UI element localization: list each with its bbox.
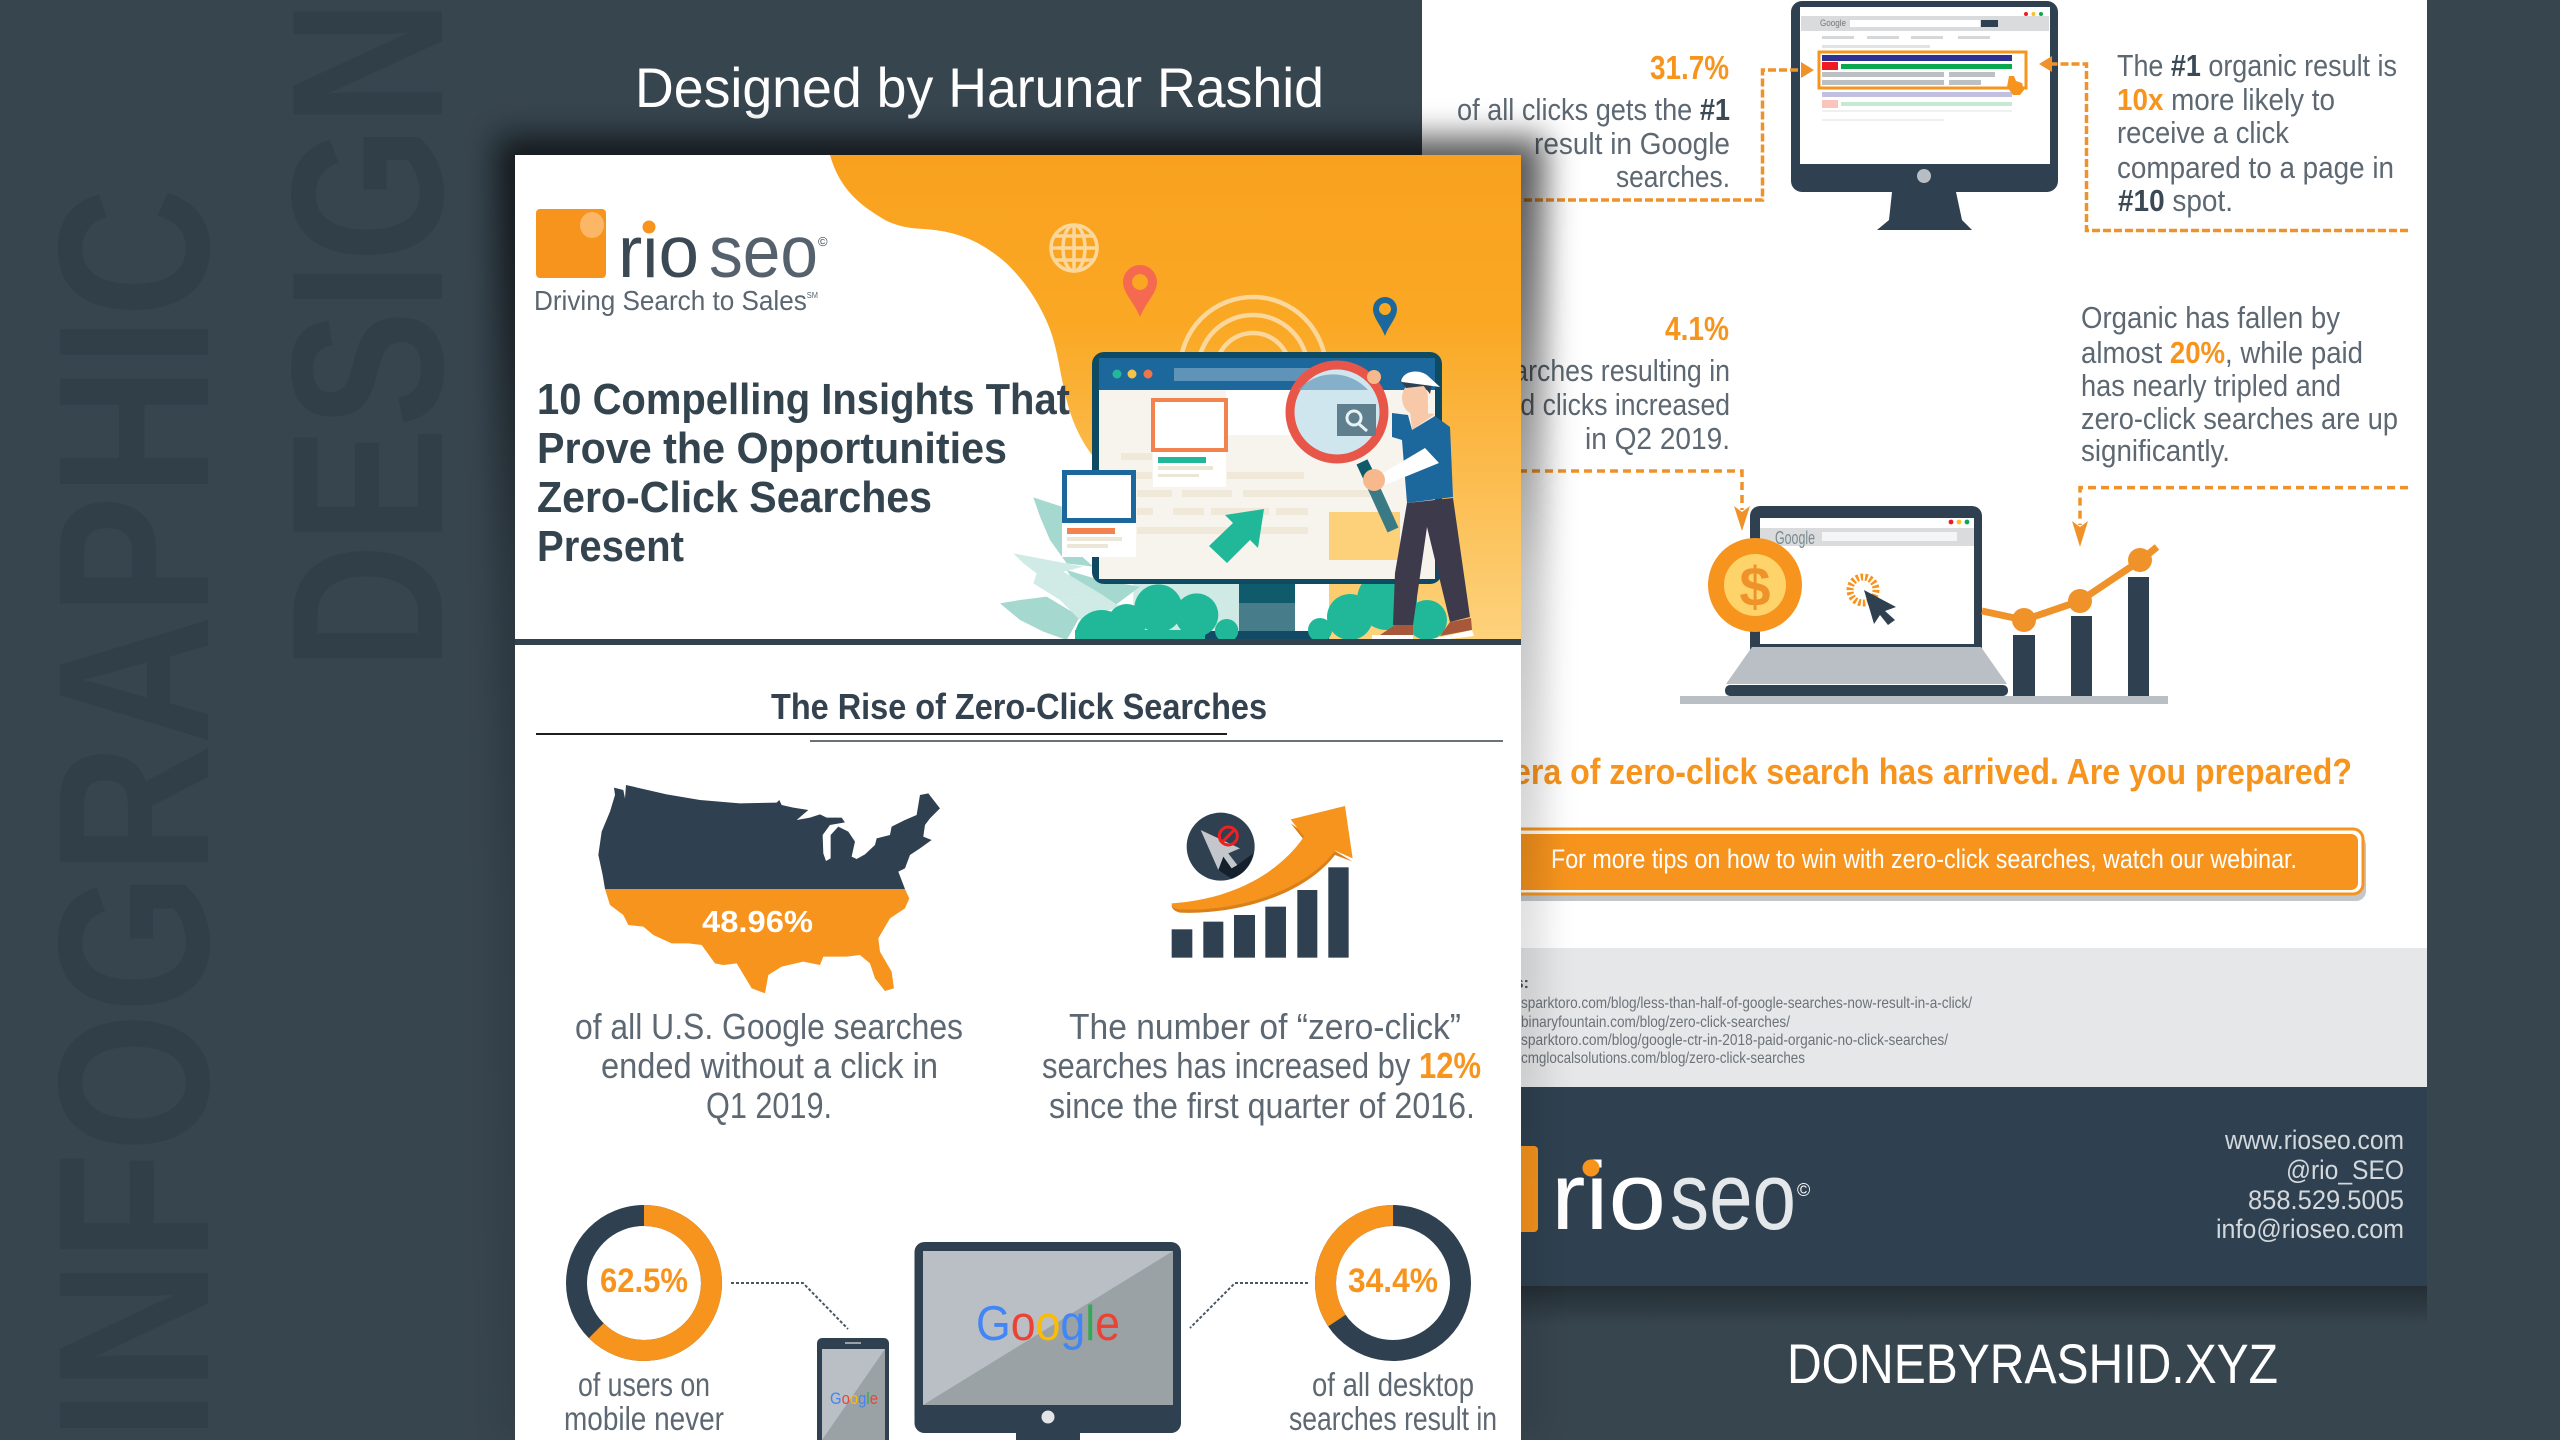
text block: desktop searches: searches result in [1289,1400,1497,1437]
callout: 31.7% of clicks: result in Google [1534,126,1730,161]
text block: 48.96% description: of all U.S. Google searches [575,1006,963,1047]
text block: sources [1461,975,1972,1067]
heading: designer credit: Designed by Harunar Rashid [635,56,1324,119]
callout: 31.7% of clicks: 31.7% [1650,49,1729,86]
icon: blue map pin [1373,297,1397,336]
icon: red map pin [1123,265,1157,317]
icon: laptop with coin and growth chart: Google [1775,528,1815,548]
text block: 48.96% description: Q1 2019. [706,1085,832,1126]
connector: mobile donut to phone [731,1283,848,1329]
icon: desktop monitor with Google [914,1242,1181,1440]
text block: contact details: www.rioseo.com [2224,1125,2404,1155]
text block: 12% increase description: since the first quarter of 2016. [1049,1085,1475,1126]
icon: laptop with coin and growth chart [1680,506,2168,704]
logo: footer rio seo: rio [1551,1143,1666,1250]
text block: mobile users: of users on [578,1366,710,1403]
icon: laptop with coin and growth chart: $ [1739,555,1771,618]
text block: sources: sparktoro.com/blog/google-ctr-in-2018-paid-organic-no-click-searches/ [1521,1032,1948,1049]
leaves [1000,497,1243,640]
text block: desktop searches [1289,1366,1497,1437]
chart: desktop donut 34.4%: 34.4% [1348,1262,1438,1300]
icon: magnifier [1290,365,1393,530]
icon: man with cap [1363,370,1474,639]
logo: rio seo: rio [618,212,699,293]
text block: contact details: info@rioseo.com [2216,1214,2404,1244]
icon: desktop monitor with search results [1791,1,2058,230]
title: Present [537,522,684,571]
callout: 4.1% paid clicks: 4.1% [1665,310,1729,347]
callout: organic has fallen: almost 20%, while paid [2081,335,2363,370]
callout: organic has fallen: significantly. [2081,433,2230,468]
heading: era of zero-click search: The era of zero-click search has arrived. Are you prepared? [1447,751,2352,792]
callout: organic has fallen: has nearly tripled and [2081,368,2341,403]
icon: phone with Google [817,1338,889,1440]
website credit: DONEBYRASHID.XYZ [1787,1332,2278,1395]
logo: rio seo: seo [709,212,818,293]
icon: US map with 48.96% [598,785,940,993]
callout: #1 organic result: compared to a page in [2117,150,2394,185]
chart: mobile donut 62.5% [576,1216,712,1350]
text block: desktop searches: of all desktop [1312,1366,1474,1403]
text block: sources: Sources: [1461,975,1529,992]
title: Prove the Opportunities [537,424,1007,473]
title [537,375,1070,571]
text block: mobile users: mobile never [564,1400,724,1437]
icon: teal arrow [1209,509,1264,563]
chart: desktop donut 34.4% [1299,1189,1487,1377]
arrow: dashed connector from 4.1% [1480,471,1750,531]
signal arcs [1180,294,1326,352]
callout: #1 organic result: 10x more likely to [2117,82,2335,117]
text block: 12% increase description: searches has increased by 12% [1042,1045,1481,1086]
connector: desktop donut to monitor [1190,1283,1308,1328]
text block: contact details [2216,1125,2404,1244]
icon: desktop monitor with search results: Google [1820,18,1846,28]
logo: rio seo: © [818,234,828,249]
panel: header illustration [830,155,1521,663]
title: Zero-Click Searches [537,473,932,522]
callout: 4.1% paid clicks: searches resulting in [1485,353,1730,388]
icon: desktop monitor with Google: Google [976,1297,1120,1351]
tagline: Driving Search to Sales [534,285,827,316]
logo: footer rio seo: seo [1670,1143,1796,1250]
text block: sources: sparktoro.com/blog/less-than-half-of-google-searches-now-result-in-a-click/ [1521,995,1972,1012]
text block: contact details: 858.529.5005 [2248,1185,2404,1215]
callout: 4.1% paid clicks: paid clicks increased [1485,387,1730,422]
text block: mobile users [564,1366,724,1437]
arrow: dashed connector from 31.7% [1480,62,1814,200]
logo: footer rio seo: © [1797,1180,1810,1200]
callout: #1 organic result: The #1 organic result is [2117,48,2397,83]
text block: sources: binaryfountain.com/blog/zero-click-searches/ [1521,1014,1790,1031]
logo: rio seo [536,209,828,293]
icon: blue result card [1062,472,1136,557]
icon: phone with Google: Google [830,1389,878,1408]
callout: 31.7% of clicks: of all clicks gets the #1 [1457,92,1730,127]
callout: 31.7% of clicks [1457,49,1730,194]
callout: #1 organic result [2117,48,2397,218]
icon: globe [1051,225,1097,271]
callout: organic has fallen [2081,300,2398,468]
icon: monitor stand [1205,584,1329,639]
text block: sources: cmglocalsolutions.com/blog/zero-click-searches [1521,1050,1805,1067]
arrow: dashed connector from #1 organic [2039,56,2408,230]
panel: left infographic page [515,155,1521,1440]
callout: 4.1% paid clicks [1485,310,1730,456]
tagline: SM [807,291,818,300]
icon: US map with 48.96%: 48.96% [702,904,813,939]
icon: browser monitor [1092,352,1442,584]
bushes [1074,584,1447,639]
panel: right infographic page [1422,0,2427,1326]
text block: 48.96% description: ended without a click in [601,1045,938,1086]
title: 10 Compelling Insights That [537,375,1070,424]
logo: footer rio seo [1440,1143,1810,1250]
panel shadow [482,112,1570,1232]
arrow: dashed connector from organic [2072,488,2408,547]
callout: #1 organic result: #10 spot. [2118,183,2233,218]
callout: organic has fallen: zero-click searches are up [2081,401,2398,436]
heading: The Rise of Zero-Click Searches: The Rise of Zero-Click Searches [771,686,1267,727]
callout: organic has fallen: Organic has fallen by [2081,300,2340,335]
text block: 12% increase description [1042,1006,1481,1126]
callout: 4.1% paid clicks: in Q2 2019. [1585,421,1730,456]
callout: #1 organic result: receive a click [2117,115,2289,150]
button: webinar call to action [1430,829,2366,901]
icon: rising bar chart with cursor [1172,806,1353,958]
chart: mobile donut 62.5%: 62.5% [600,1262,688,1300]
text block: 48.96% description [575,1006,963,1126]
text block: contact details: @rio_SEO [2286,1155,2404,1185]
callout: 31.7% of clicks: searches. [1616,159,1730,194]
text block: 12% increase description: The number of “zero-click” [1069,1006,1461,1047]
button: webinar call to action: For more tips on how to win with zero-click searches, watch our webinar. [1551,844,2297,874]
